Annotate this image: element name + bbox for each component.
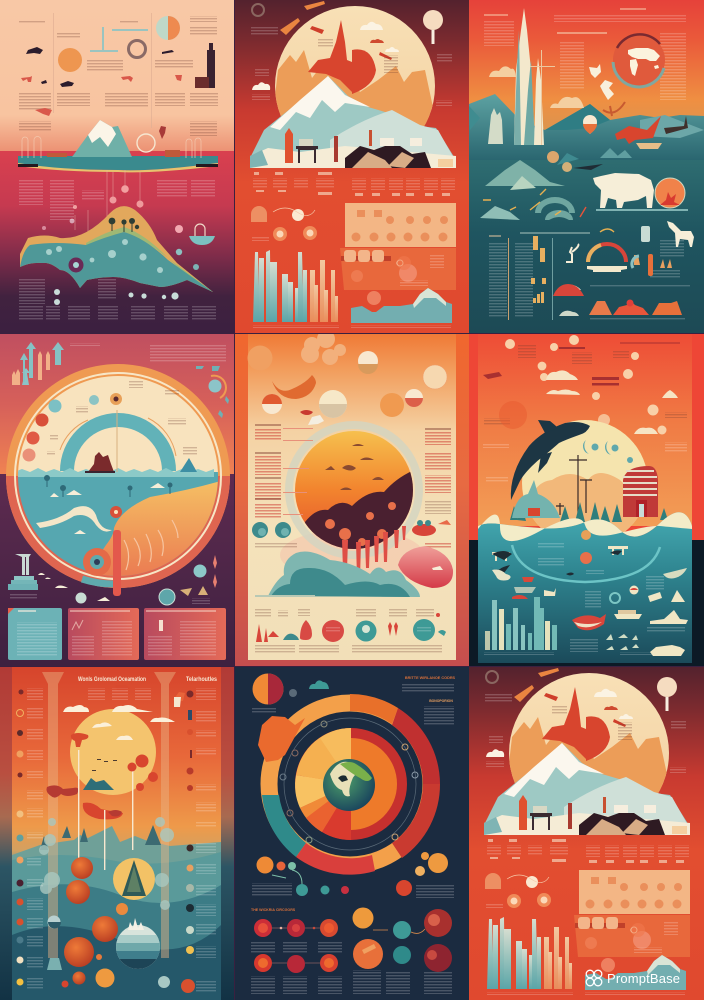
- snow mountain range: [250, 76, 456, 168]
- globe with ring: [613, 34, 665, 87]
- text blocks: upper columns: [19, 13, 218, 136]
- panel: sun and planets poster: [0, 667, 234, 1000]
- top left pie: [252, 674, 284, 704]
- orbit circle: [284, 718, 416, 850]
- buildings: [285, 128, 453, 168]
- big sun: [70, 709, 156, 795]
- right floating icons: [196, 366, 229, 418]
- headings: BONOPORION: [429, 699, 453, 703]
- teal clouds: [255, 552, 420, 597]
- red fungi and rocks: [46, 685, 130, 819]
- submerged bowl arc: [512, 545, 660, 582]
- pale pink wash below sphere: [280, 529, 424, 581]
- cream dome: [522, 420, 648, 546]
- small birds: [92, 759, 117, 771]
- red fish and boats: [512, 588, 688, 656]
- small bar labels: [253, 325, 339, 328]
- inner rings: [295, 728, 407, 840]
- text blocks: red zone: [19, 180, 216, 321]
- hanging red balls: [78, 750, 158, 870]
- icon: T-shaped pipeline: [90, 27, 148, 51]
- crescent icons: [583, 440, 633, 463]
- red creature: [615, 116, 688, 149]
- clouds on sun: [63, 705, 175, 740]
- icon: watermark brain: [586, 970, 602, 986]
- text blocks: [251, 683, 454, 994]
- center stem and targets: [83, 393, 122, 596]
- ring interior: [4, 370, 224, 584]
- sun circle with halo: [499, 401, 527, 429]
- small ring markers: [280, 721, 418, 843]
- mountain range: [469, 94, 704, 160]
- text blocks: header: [484, 8, 686, 100]
- bottom row: icons and text: [255, 608, 446, 653]
- trees and dome house: [510, 480, 668, 522]
- bar chart: [253, 250, 338, 322]
- satellites row: [256, 852, 448, 896]
- icons: red bottle cluster: [632, 254, 672, 276]
- text blocks: top: [251, 27, 452, 106]
- teal area chart: [351, 288, 452, 328]
- panel: towers and wildlife poster: [469, 0, 704, 333]
- icons: flowers and branches: [589, 64, 625, 116]
- birds and clouds: [252, 1, 399, 90]
- layered teal hills: [12, 825, 221, 1000]
- lower red circles: [254, 919, 338, 973]
- left circles: [22, 395, 99, 462]
- tower and stacked blocks lower left: [8, 554, 68, 599]
- card: teal table: [8, 608, 62, 660]
- peach table of icons: [345, 203, 456, 247]
- small red machine: [412, 520, 451, 536]
- watermark: PromptBase: PromptBase: [607, 971, 680, 986]
- panel: whale and water poster: [469, 334, 704, 666]
- sphere with dark mottling: [295, 415, 414, 560]
- lower planets: [352, 908, 452, 972]
- drips: [342, 526, 406, 578]
- bottom red hills: [559, 300, 685, 320]
- gauge semicircle: [587, 244, 627, 272]
- panel: concentric earth rings poster: [235, 667, 469, 1000]
- big cream sun disc with orange peaks: [270, 6, 440, 166]
- icon: orange sun disc: [58, 48, 82, 72]
- text blocks in ring: [47, 380, 197, 456]
- icon: balloon: [423, 10, 443, 44]
- tall white towers: [488, 8, 555, 145]
- right side text and badges: [173, 688, 216, 993]
- headings: THE WICKRIA CIRCGORS: [251, 908, 296, 912]
- clouds: [489, 66, 584, 108]
- panel: circular world diagram poster: [0, 334, 234, 666]
- icon: target disc: [252, 4, 264, 16]
- lower right icons: [76, 555, 217, 605]
- icons: small animals: [26, 47, 174, 87]
- lower text blocks: [489, 232, 690, 320]
- icons: palm and domes: [553, 244, 584, 296]
- card: red right: [144, 608, 226, 660]
- icon: hot air balloon: [583, 115, 597, 134]
- teal balls: [252, 522, 297, 548]
- red text lines right: [425, 428, 451, 548]
- whale: [511, 420, 590, 500]
- orange band with small badges: [340, 248, 456, 305]
- white cloud shapes: [546, 370, 678, 434]
- title text: Telarhoutles: [186, 677, 218, 683]
- bar chart: [485, 597, 557, 650]
- peach bubbles at top: [248, 330, 447, 418]
- dog icon and cabin: [641, 221, 694, 247]
- outer ring segments: [258, 694, 440, 875]
- planet spheres: [48, 857, 160, 988]
- striped beehive tower: [623, 466, 658, 517]
- corner arrows chart: [12, 342, 226, 385]
- icon: teacup: [189, 224, 215, 245]
- orbit arcs: [60, 418, 176, 456]
- panel: mountain and city poster (repeat): [469, 667, 704, 1000]
- vertical columns: [42, 672, 176, 988]
- title text: Wonls Grolomad Oceamation: [78, 677, 146, 683]
- hanging lines and pink bubbles: [42, 170, 199, 270]
- domes row: [251, 206, 317, 241]
- red text lines left: [255, 424, 313, 519]
- main ring: [6, 364, 230, 588]
- smoke puffs along columns: [39, 817, 174, 910]
- earth globe: [323, 759, 375, 811]
- floating peach bubbles: [505, 335, 666, 434]
- bull silhouette on plinth: [593, 173, 688, 211]
- island with mountain: [18, 120, 218, 172]
- poles: [556, 455, 592, 515]
- central house: [85, 452, 115, 473]
- card: red left: [68, 608, 139, 660]
- pale halo ring around sphere: [289, 425, 419, 555]
- undersea icons: [490, 530, 687, 603]
- panel: mountain and city poster: [235, 0, 471, 333]
- orange squiggles and small fox: [483, 189, 614, 232]
- cloud and small icons: [289, 680, 329, 697]
- lower grid: icons and text: [253, 172, 455, 196]
- text blocks in water: [484, 543, 685, 655]
- ocean: [478, 512, 692, 663]
- panel: cream poster with sphere: [235, 330, 469, 666]
- icon: ring diagram: [128, 40, 146, 58]
- red dashes: [483, 347, 619, 386]
- chart: pie: [156, 16, 180, 40]
- red blob at right: [398, 546, 453, 588]
- headings: BRITTE WIRLANOE CODRS: [405, 676, 456, 680]
- panel: ocean and mountain cross-section poster: [0, 0, 234, 333]
- bubble chain under island: [54, 289, 179, 305]
- small orange bars: [531, 236, 546, 303]
- title text: [78, 677, 218, 683]
- middle-ground teal hills: [480, 148, 632, 220]
- left side text and badges: [16, 688, 151, 990]
- icon: lighthouse tower and buildings: [195, 43, 215, 88]
- text blocks upper: [483, 342, 687, 482]
- undersea mountain cross-section: [20, 206, 213, 292]
- headings: [251, 676, 456, 912]
